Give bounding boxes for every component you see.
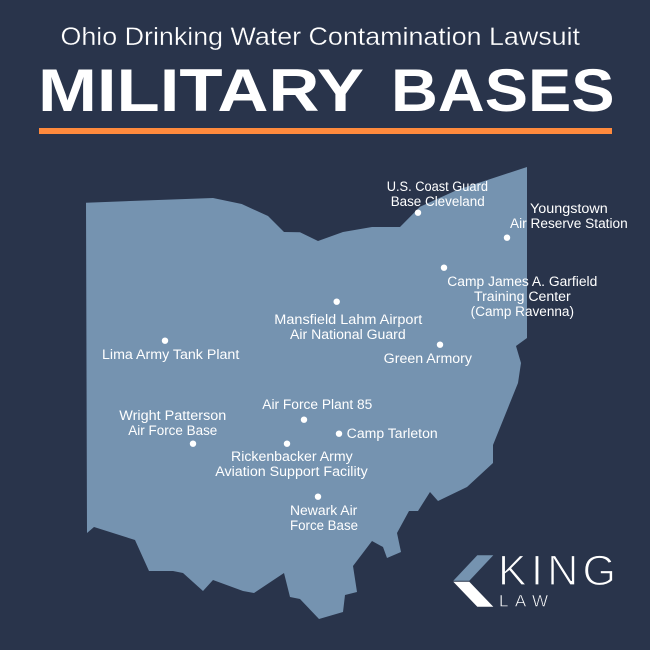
location: Mansfield Lahm Airport Air National Guard: Air National Guard — [290, 327, 406, 342]
location: Camp James A. Garfield Training Center: (Camp Ravenna) — [471, 304, 574, 319]
location: Wright Patterson Air Force Base: Air Force Base — [128, 423, 217, 438]
location: Newark Air Force Base: Newark Air — [290, 503, 358, 518]
location: Lima Army Tank Plant: Lima Army Tank Plant — [102, 347, 240, 362]
title — [38, 57, 614, 124]
location: Camp James A. Garfield Training Center: Camp James A. Garfield — [447, 274, 597, 289]
location: Rickenbacker Army Aviation Support Facility: Rickenbacker Army — [231, 449, 353, 464]
location: Air Force Plant 85 — [262, 397, 372, 423]
map: Ohio outline — [86, 167, 527, 619]
location: Green Armory — [384, 342, 472, 366]
location: Air Force Plant 85: Air Force Plant 85 — [262, 397, 372, 412]
location: Rickenbacker Army Aviation Support Facility: Aviation Support Facility — [215, 464, 368, 479]
location: Mansfield Lahm Airport Air National Guard — [274, 298, 423, 342]
location: Mansfield Lahm Airport Air National Guard: Mansfield Lahm Airport — [274, 312, 423, 327]
location: U.S. Coast Guard Base Cleveland: Base Cleveland — [391, 194, 485, 209]
location: Newark Air Force Base — [290, 494, 358, 533]
location: Camp James A. Garfield Training Center: Training Center — [474, 289, 571, 304]
icon: logo chevron — [453, 555, 493, 607]
orange title rule — [39, 128, 612, 134]
location: Rickenbacker Army Aviation Support Facility — [215, 440, 368, 479]
location: U.S. Coast Guard Base Cleveland — [387, 179, 488, 216]
title: BASES — [391, 57, 614, 124]
location: Youngstown Air Reserve Station: Air Reserve Station — [510, 216, 628, 231]
location: Camp James A. Garfield Training Center — [441, 264, 597, 319]
location: Camp Tarleton: Camp Tarleton — [347, 426, 438, 441]
location: Youngstown Air Reserve Station — [504, 201, 628, 241]
logo wordmark: KING: KING — [498, 547, 616, 595]
location: Newark Air Force Base: Force Base — [290, 518, 358, 533]
location: Wright Patterson Air Force Base: Wright Patterson — [119, 408, 226, 423]
location: Wright Patterson Air Force Base — [119, 408, 226, 447]
logo wordmark: LAW: LAW — [499, 592, 548, 611]
location: Green Armory: Green Armory — [384, 351, 472, 366]
location: Lima Army Tank Plant — [102, 338, 240, 362]
location: Youngstown Air Reserve Station: Youngstown — [530, 201, 608, 216]
subtitle: Ohio Drinking Water Contamination Lawsuit — [60, 23, 580, 51]
location: U.S. Coast Guard Base Cleveland: U.S. Coast Guard — [387, 179, 488, 194]
logo: King Law — [453, 547, 616, 611]
title: MILITARY — [38, 57, 364, 124]
